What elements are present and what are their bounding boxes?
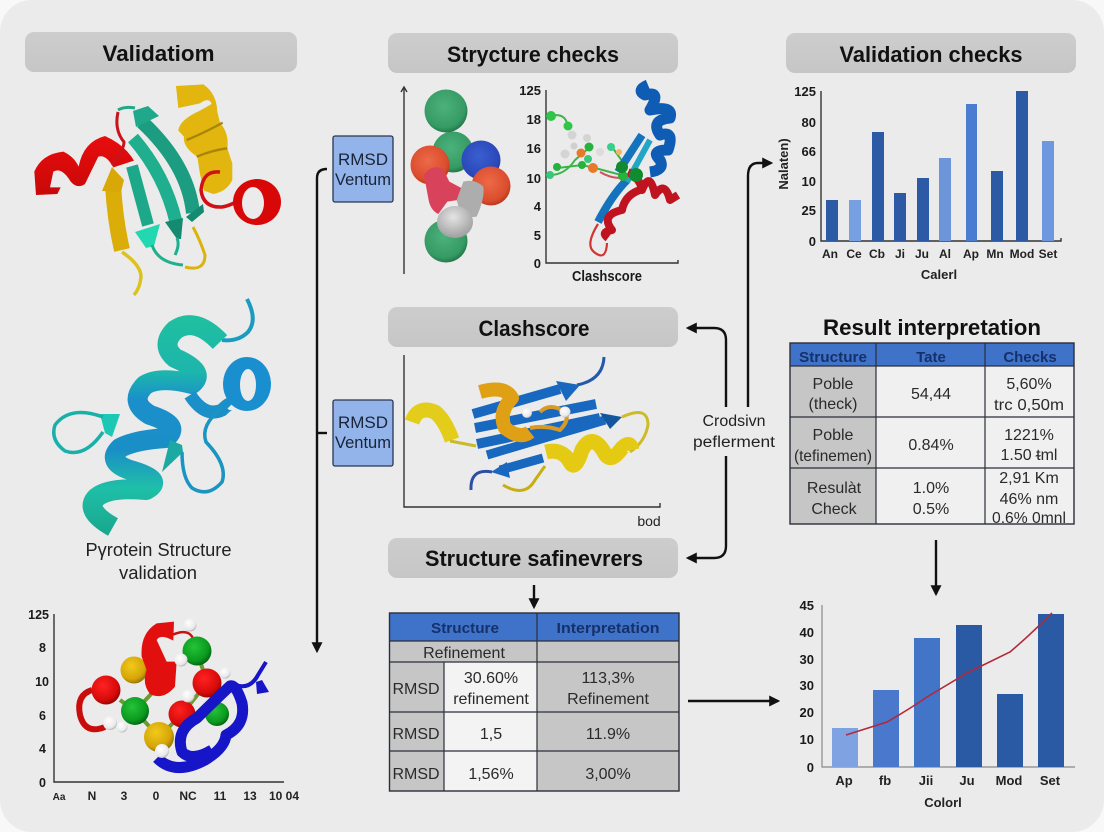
bar chart: colorl with trend line: 30 xyxy=(800,652,814,667)
arrow: to structure safinevrers table xyxy=(533,585,535,607)
bar chart: colorl with trend line: 40 xyxy=(800,625,814,640)
table: structure interpretation: Refinement xyxy=(567,691,649,708)
chart: clashscore with ribbon: 0 xyxy=(534,256,541,271)
chart: ball-and-ribbon model with axes: 125 xyxy=(28,608,49,622)
heading: Structure safinevrers xyxy=(388,538,678,578)
bar chart: validation checks: Al xyxy=(939,247,951,261)
chart: clashscore with ribbon: 16 xyxy=(527,141,541,156)
chart: ball-and-ribbon model with axes: 0 xyxy=(153,789,160,803)
table: result interpretation: Poble xyxy=(813,427,854,444)
bar chart: validation checks: 80 xyxy=(802,115,816,130)
table: result interpretation: 0.84% xyxy=(908,437,954,454)
blue helix xyxy=(157,686,243,768)
table: structure interpretation: Interpretation xyxy=(556,620,660,637)
table: structure interpretation: RMSD xyxy=(392,681,440,698)
chart: ball-and-ribbon model with axes: 10 04 xyxy=(269,789,299,803)
bar chart: colorl with trend line: Ap xyxy=(835,773,853,788)
table: result interpretation: Resulàt xyxy=(807,480,862,497)
table: result interpretation: Poble xyxy=(813,376,854,393)
table: result interpretation: 0.6% 0mnl xyxy=(992,510,1066,527)
heading: Validatiom xyxy=(25,32,297,72)
bar chart: colorl with trend line: fb xyxy=(879,773,891,788)
table: structure interpretation: Refinement xyxy=(423,645,505,662)
green strands xyxy=(142,122,193,213)
table: structure interpretation: 3,00% xyxy=(585,766,631,783)
bar chart: validation checks: Mn xyxy=(986,247,1004,261)
heading: Clashscore xyxy=(388,307,678,347)
table: result interpretation: 0.5% xyxy=(913,501,949,518)
chart: clashscore with ribbon: 5 xyxy=(534,228,541,243)
heading: Validation checks: Validation checks xyxy=(840,42,1022,67)
chart: clashscore with ribbon: 10 xyxy=(527,171,541,186)
table: structure interpretation: 11.9% xyxy=(586,726,630,743)
connector: left bracket arrow xyxy=(317,169,327,651)
bar chart: validation checks: 66 xyxy=(802,144,816,159)
red ring xyxy=(233,179,281,225)
table: result interpretation: 5,60% xyxy=(1006,376,1052,393)
bar chart: colorl with trend line: Mod xyxy=(996,773,1022,788)
table: result interpretation: trc 0,50m xyxy=(994,397,1064,414)
bar chart: validation checks: Ju xyxy=(915,247,929,261)
label: cross-validation refinement: Crodsivn xyxy=(702,413,766,430)
caption: protein structure validation xyxy=(86,540,232,583)
red helix xyxy=(142,622,177,696)
heading: Validation checks xyxy=(786,33,1076,73)
chart: clash model with blue strands and yellow helices: bod xyxy=(637,513,661,529)
bar chart: validation checks: 10 xyxy=(802,174,816,189)
caption: protein structure validation: validation xyxy=(119,563,197,583)
bar chart: colorl with trend line: Set xyxy=(1040,773,1061,788)
heading: Structure safinevrers: Structure safinevrers xyxy=(425,546,643,571)
heading: Structure checks xyxy=(388,33,678,73)
chart: ball-and-ribbon model with axes: 6 xyxy=(39,709,46,723)
trend line xyxy=(846,613,1052,735)
bar chart: validation checks: Mod xyxy=(1010,247,1034,261)
bar chart: colorl with trend line: 20 xyxy=(800,705,814,720)
chart: clashscore with ribbon: 125 xyxy=(519,83,541,98)
yellow helix xyxy=(176,84,232,194)
bar chart: colorl with trend line xyxy=(800,598,1075,810)
table: result interpretation: Checks xyxy=(1003,349,1057,366)
bar chart: validation checks: Ce xyxy=(846,247,862,261)
arrow: up to validation checks xyxy=(748,163,771,407)
box: RMSD Ventum top xyxy=(333,136,393,202)
table: structure interpretation: 1,56% xyxy=(468,766,514,783)
table: result interpretation: 1.0% xyxy=(913,480,949,497)
table: result interpretation: Check xyxy=(811,501,858,518)
bar chart: validation checks: 0 xyxy=(809,234,816,249)
arrow: result table to bottom chart xyxy=(935,540,937,594)
sphere cluster model xyxy=(401,87,510,274)
bar chart: validation checks: Set xyxy=(1039,247,1057,261)
bar chart: validation checks: Ji xyxy=(895,247,905,261)
chart: ball-and-ribbon model with axes: N xyxy=(88,789,96,803)
chart: clashscore with ribbon xyxy=(519,83,678,285)
chart: ball-and-ribbon model with axes: Aa xyxy=(53,792,66,803)
heading: Structure checks: Strycture checks xyxy=(447,42,619,67)
chart: ball-and-ribbon model with axes: 3 xyxy=(121,789,128,803)
table: structure interpretation: 1,5 xyxy=(480,726,502,743)
bar chart: colorl with trend line: 10 xyxy=(800,732,814,747)
table: result interpretation: 1221% xyxy=(1004,427,1054,444)
table: result interpretation: (theck) xyxy=(809,396,857,413)
table: result interpretation: Structure xyxy=(799,349,867,366)
box: RMSD Ventum bottom: Ventum xyxy=(335,433,391,452)
chart: ball-and-ribbon model with axes: 13 xyxy=(243,789,257,803)
heading: Clashscore: Clashscore xyxy=(478,316,590,341)
table: structure interpretation: 113,3% xyxy=(581,670,635,687)
bar chart: validation checks: An xyxy=(822,247,838,261)
bar chart: colorl with trend line: Ju xyxy=(959,773,975,788)
bar chart: validation checks: Nalaten) xyxy=(776,138,791,190)
box: RMSD Ventum top: Ventum xyxy=(335,170,391,189)
chart: ball-and-ribbon model with axes: 0 xyxy=(39,776,46,790)
table: structure interpretation: RMSD xyxy=(392,766,440,783)
red helix xyxy=(34,136,134,195)
table: structure interpretation: 30.60% xyxy=(464,670,518,687)
label: cross-validation refinement: peflerment xyxy=(693,434,776,451)
heading: result interpretation: Result interpretation xyxy=(823,315,1041,340)
bar chart: colorl with trend line: Jii xyxy=(919,773,933,788)
bar chart: colorl with trend line: 30 xyxy=(800,678,814,693)
label: cross-validation refinement xyxy=(693,413,776,451)
chart: clashscore with ribbon: 18 xyxy=(527,112,541,127)
chart: ball-and-ribbon model with axes: 11 xyxy=(214,789,227,803)
chart: ball-and-ribbon model with axes: NC xyxy=(179,789,197,803)
bar chart: colorl with trend line: 0 xyxy=(807,760,814,775)
table: result interpretation: 2,91 Km xyxy=(999,470,1059,487)
table: result interpretation: 54,44 xyxy=(911,386,951,403)
chart: ball-and-ribbon model with axes: 10 xyxy=(35,675,49,689)
protein ribbon: red, green and yellow fold xyxy=(34,84,281,295)
heading: Validatiom: Validatiom xyxy=(102,41,214,66)
table: result interpretation: 1.50 ᵵml xyxy=(1001,447,1057,464)
caption: protein structure validation: Pγrotein Structure xyxy=(86,540,232,560)
table: result interpretation: (tefinemen) xyxy=(794,448,872,465)
chart: ball-and-ribbon model with axes: 8 xyxy=(39,641,46,655)
bar chart: colorl with trend line: Colorl xyxy=(924,795,962,810)
chart: clashscore with ribbon: Clashscore xyxy=(572,269,642,285)
chart: clashscore with ribbon: 4 xyxy=(534,199,542,214)
chart: ball-and-ribbon model with axes xyxy=(28,608,299,803)
box: RMSD Ventum top: RMSD xyxy=(338,150,388,169)
yellow strand xyxy=(113,185,122,250)
table: result interpretation: Tate xyxy=(916,349,946,366)
bar chart: validation checks: Calerl xyxy=(921,267,957,282)
protein ribbon: teal and blue helix xyxy=(54,299,271,527)
box: RMSD Ventum bottom xyxy=(333,400,393,466)
table: structure interpretation: RMSD xyxy=(392,726,440,743)
arrow: to structure safinevrers heading xyxy=(688,456,726,558)
bar chart: validation checks: 25 xyxy=(802,203,816,218)
table: structure interpretation: Structure xyxy=(431,620,499,637)
bar chart: validation checks: Cb xyxy=(869,247,885,261)
table: result interpretation: 46% nm xyxy=(1000,491,1058,508)
chart: ball-and-ribbon model with axes: 4 xyxy=(39,742,46,756)
bar chart: validation checks: Ap xyxy=(963,247,979,261)
box: RMSD Ventum bottom: RMSD xyxy=(338,413,388,432)
chart: clash model with blue strands and yellow helices xyxy=(404,355,661,529)
arrow: to clashscore heading xyxy=(688,328,726,407)
arrow: table to bottom bar chart xyxy=(688,700,778,702)
table: structure interpretation xyxy=(390,613,679,791)
bar chart: colorl with trend line: 45 xyxy=(800,598,814,613)
table: structure interpretation: refinement xyxy=(453,691,529,708)
table: result interpretation xyxy=(790,343,1074,527)
bar chart: validation checks: 125 xyxy=(794,84,816,99)
bar chart: validation checks xyxy=(776,84,1061,282)
